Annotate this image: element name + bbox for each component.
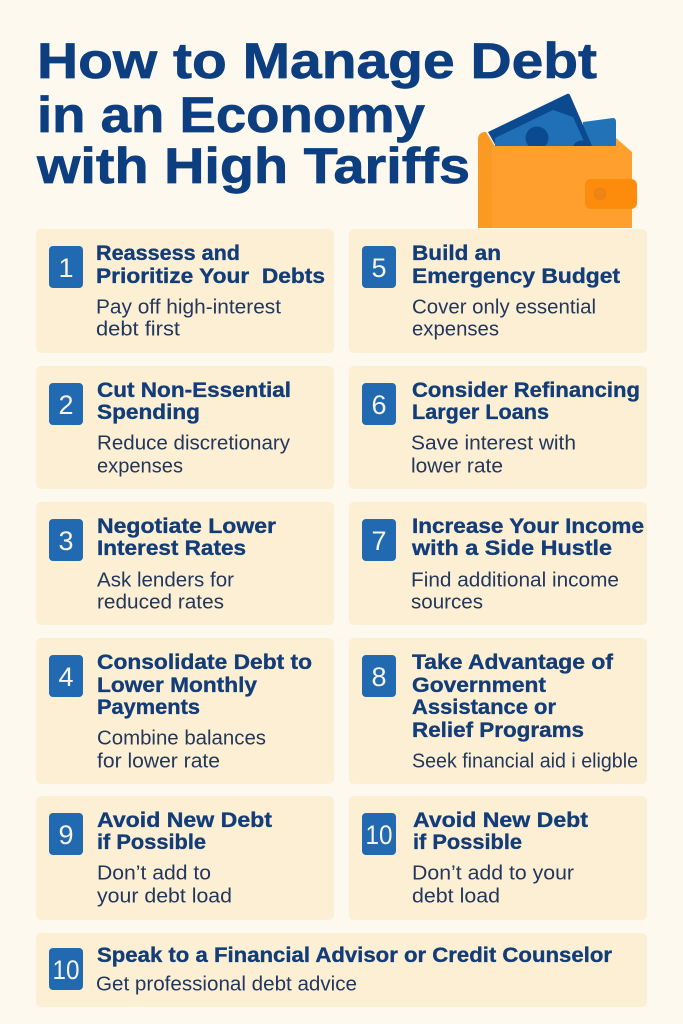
panel: step 8: [349, 638, 647, 784]
panel: step 10: Avoid New Debt: [413, 809, 588, 832]
panel: step 10: [349, 796, 647, 920]
panel: step 4: [36, 638, 334, 784]
panel: step 7: Increase Your Income: [412, 515, 644, 538]
panel: step 8: Assistance or: [412, 696, 556, 719]
panel: step 9: your debt load: [97, 886, 232, 908]
panel: step 8: Seek financial aid i eligble: [412, 750, 638, 772]
panel: step 4: Combine balances: [97, 728, 266, 750]
panel: step 4: Lower Monthly: [97, 674, 257, 697]
panel: step 6: lower rate: [411, 456, 503, 478]
panel: step 10 financial advisor: 10: [52, 955, 80, 985]
panel: step 1: Reassess and: [96, 242, 240, 265]
panel: step 10 financial advisor: Speak to a Financial Advisor or Credit Counselor: [97, 944, 612, 967]
panel: step 3: Interest Rates: [97, 537, 246, 560]
panel: step 5: Emergency Budget: [412, 265, 620, 288]
panel: step 1: Pay off high-interest: [96, 296, 281, 318]
panel: step 2: Reduce discretionary: [97, 432, 290, 454]
panel: step 4: for lower rate: [97, 750, 220, 772]
panel: step 2: Spending: [97, 401, 200, 424]
title: with High Tariffs: [36, 138, 470, 194]
panel: step 8: Relief Programs: [412, 719, 584, 742]
panel: step 9: if Possible: [97, 831, 206, 854]
panel: step 5: [349, 229, 647, 353]
panel: step 2: 2: [58, 390, 74, 420]
panel: step 2: Cut Non-Essential: [97, 379, 291, 402]
panel: step 3: [36, 502, 334, 625]
panel: step 10 financial advisor: [36, 933, 647, 1007]
panel: step 9: Avoid New Debt: [97, 809, 272, 832]
panel: step 6: [349, 366, 647, 489]
panel: step 9: Don’t add to: [97, 862, 211, 884]
panel: step 5: Cover only essential: [412, 296, 596, 318]
panel: step 4: Payments: [97, 696, 200, 719]
title: How to Manage Debt: [37, 33, 597, 89]
panel: step 3: reduced rates: [97, 592, 224, 614]
panel: step 7: with a Side Hustle: [411, 537, 612, 560]
panel: step 10: debt load: [412, 886, 500, 908]
panel: step 8: Take Advantage of: [412, 651, 614, 674]
panel: step 6: Larger Loans: [412, 401, 549, 424]
panel: step 10: Don’t add to your: [412, 862, 574, 884]
panel: step 1: 1: [58, 253, 74, 283]
panel: step 5: 5: [371, 253, 387, 283]
panel: step 8: Government: [412, 674, 546, 697]
panel: step 6: Consider Refinancing: [412, 379, 640, 402]
panel: step 2: [36, 366, 334, 489]
panel: step 10: if Possible: [413, 831, 522, 854]
title: in an Economy: [37, 87, 425, 143]
panel: step 4: Consolidate Debt to: [97, 651, 312, 674]
panel: step 3: Negotiate Lower: [97, 515, 276, 538]
panel: step 10 financial advisor: Get professional debt advice: [96, 974, 357, 996]
panel: step 3: Ask lenders for: [97, 570, 234, 592]
panel: step 5: expenses: [412, 318, 499, 340]
panel: step 9: 9: [58, 820, 74, 850]
panel: step 7: [349, 502, 647, 625]
panel: step 1: [36, 229, 334, 353]
panel: step 7: sources: [411, 592, 483, 614]
panel: step 9: [36, 796, 334, 920]
panel: step 5: Build an: [412, 242, 501, 265]
panel: step 7: Find additional income: [411, 570, 619, 592]
panel: step 6: Save interest with: [411, 432, 576, 454]
panel: step 3: 3: [58, 526, 74, 556]
panel: step 2: expenses: [97, 456, 183, 478]
panel: step 1: Prioritize Your Debts: [96, 265, 325, 288]
panel: step 1: debt first: [96, 318, 180, 340]
panel: step 8: 8: [371, 662, 387, 692]
title: [36, 33, 597, 194]
panel: step 7: 7: [371, 526, 387, 556]
panel: step 4: 4: [58, 662, 74, 692]
panel: step 10: 10: [366, 820, 392, 850]
icon: wallet with banknotes: [478, 94, 637, 228]
panel: step 6: 6: [371, 390, 387, 420]
